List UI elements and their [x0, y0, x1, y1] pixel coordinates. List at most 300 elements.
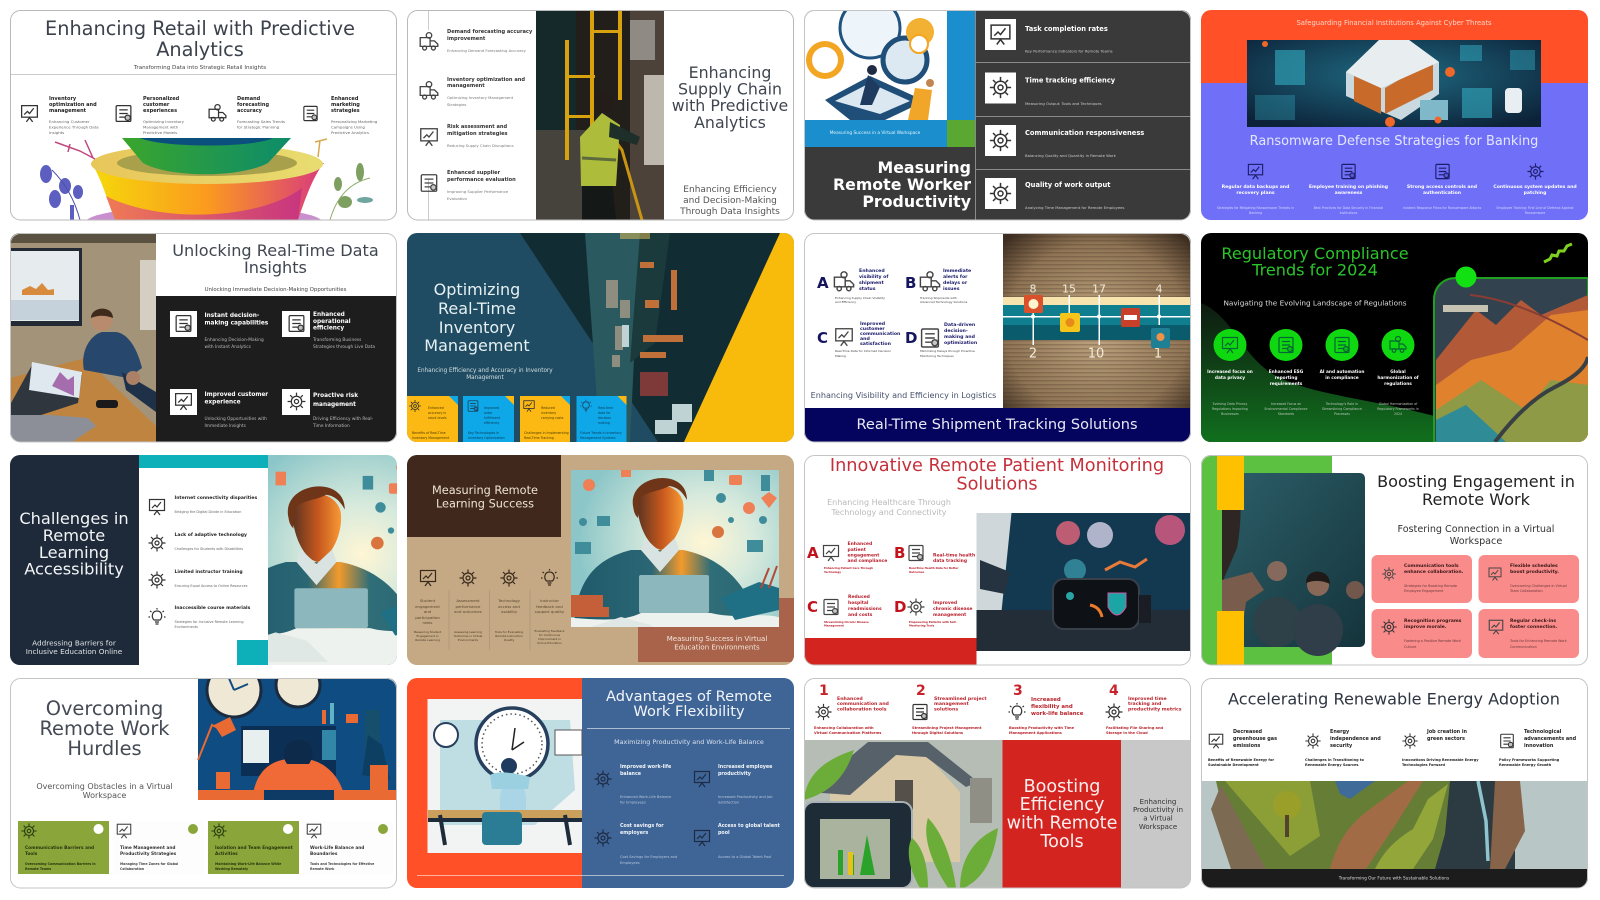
advantages list: Satisfaction	[718, 800, 739, 804]
four hurdle cards: Collaboration	[120, 867, 145, 871]
slide title: with Predictive	[672, 96, 788, 114]
four engagement cards: enhance collaboration.	[1404, 568, 1464, 574]
slide subtitle: Workspace	[1139, 823, 1177, 831]
strategy items: authentication	[1423, 190, 1461, 196]
slide subtitle: Enhancing Healthcare Through	[827, 498, 951, 506]
strategy items: Strategies for Mitigating Ransomware Threats in	[1217, 206, 1294, 210]
panel: ransomware defense	[1201, 10, 1588, 220]
list of four retail items: accuracy	[237, 108, 263, 114]
numbered tools row: tracking and	[1128, 700, 1161, 706]
tracking features: status	[859, 286, 876, 292]
student illustration	[212, 446, 454, 674]
metric descriptions: Measuring Output: Tools and Techniques	[1025, 100, 1102, 106]
four engagement cards: boost productivity.	[1510, 568, 1559, 574]
slide subtitle: Workspace	[83, 790, 126, 800]
house and meter photo	[804, 740, 1003, 888]
strategy items: Regular data backups and	[1222, 184, 1289, 190]
timeline image: 8	[1030, 282, 1036, 296]
slide subtitle: Unlocking Immediate Decision-Making Opportunities	[205, 287, 347, 293]
success metrics: access and	[498, 604, 520, 608]
success metrics: feedback and	[536, 604, 563, 608]
floating landscape illustration	[1201, 781, 1588, 869]
numbered tools row: 4	[1109, 683, 1119, 699]
tracking features: D	[905, 329, 917, 347]
four insight items	[170, 311, 375, 428]
warehouse photo	[520, 233, 781, 442]
panel: retail predictive analytics	[11, 20, 396, 220]
success metrics: Online Education	[537, 641, 562, 645]
four insight items: Proactive risk	[313, 393, 358, 399]
strategy items: patching	[1524, 190, 1546, 196]
list of four retail items: Predictive Models	[143, 130, 177, 134]
success metrics: and outcomes	[454, 608, 482, 614]
advantages list: Increased Productivity and Job	[718, 795, 773, 799]
slide subtitle: Fostering Connection in a Virtual	[1398, 524, 1554, 534]
green dot	[1456, 266, 1476, 288]
four insight items: Enhancing Decision-Making	[204, 336, 264, 342]
four engagement cards: Overcoming Challenges in Virtual	[1510, 584, 1567, 588]
success metrics: Student	[420, 598, 436, 602]
panel: real-time data insights	[10, 233, 397, 442]
top caption: Safeguarding Financial Institutions Against Cyber Threats	[1296, 19, 1492, 27]
title: Analytics	[156, 38, 244, 60]
four insight items: efficiency	[313, 326, 344, 332]
four compliance trends: Technology's Role in	[1325, 402, 1358, 406]
tracking features: communication	[860, 330, 900, 336]
list of four retail items: forecasting	[237, 102, 269, 108]
caption: Enhancing Visibility and Efficiency in Logistics	[811, 390, 996, 400]
supply chain items: Optimizing Inventory Management	[447, 94, 514, 100]
four compliance trends: Processes	[1334, 412, 1350, 416]
numbered tools row: Improved time	[1128, 696, 1167, 702]
monitoring features: Technology	[824, 570, 841, 574]
list of four retail items: Inventory	[49, 96, 77, 102]
panel: supply chain predictive analytics	[407, 10, 794, 220]
list of four retail items: Enhancing Customer	[49, 118, 90, 124]
slide subtitle: Enhancing	[1140, 798, 1176, 806]
home office illustration	[198, 663, 397, 800]
tracking features: alerts for	[943, 274, 968, 280]
success metrics: Quality	[504, 638, 514, 642]
list of four retail items: Forecasting Sales Trends	[237, 118, 285, 124]
slide title: Measuring Remote	[432, 484, 538, 496]
four compliance trends: data privacy	[1215, 374, 1245, 380]
slide title: Unlocking Real-Time Data	[172, 240, 379, 260]
slide subtitle: Maximizing Productivity and Work-Life Balance	[614, 738, 764, 746]
four hurdle cards: Working Remotely	[215, 867, 249, 871]
advantages list: pool	[718, 830, 730, 836]
slide title: Overcoming	[46, 696, 163, 720]
four benefit tiles: Real-Time Tracking	[524, 436, 554, 440]
monitoring features	[807, 540, 975, 628]
monitoring features: data tracking	[933, 558, 967, 564]
list of four retail items	[22, 96, 378, 134]
four hurdle cards: Communication Barriers and	[25, 844, 94, 850]
renewable benefits: Innovations Driving Renewable Energy	[1402, 758, 1479, 762]
renewable benefits: Technological	[1524, 729, 1562, 735]
timeline image: 2	[1029, 346, 1037, 362]
list of four retail items: customer	[143, 102, 170, 108]
warehouse worker photo	[536, 10, 664, 220]
slide title: Real-Time Shipment Tracking Solutions	[856, 417, 1138, 433]
renewable benefits: innovation	[1524, 743, 1554, 749]
four insight items: Enhanced	[313, 312, 345, 318]
four hurdle cards: Remote Teams	[25, 867, 51, 871]
numbered tools row: communication and	[837, 700, 889, 706]
landscape tablet image	[1434, 278, 1588, 442]
slide subtitle: Addressing Barriers for	[32, 638, 116, 647]
tracking features: optimization	[944, 340, 977, 346]
list of four retail items: optimization and	[49, 102, 97, 108]
slide title: Remote	[43, 526, 105, 544]
four engagement cards	[1372, 555, 1579, 658]
slide title: Boosting	[1024, 777, 1100, 797]
numbered tools row: Facilitating File Sharing and	[1106, 726, 1164, 730]
numbered tools row: Boosting Productivity with Time	[1009, 726, 1075, 730]
monitoring features: engagement	[848, 552, 880, 558]
strategy items: Best Practices for Data Security in Financial	[1314, 206, 1383, 210]
supply chain items: performance evaluation	[447, 177, 516, 183]
renewable benefits: Decreased	[1233, 729, 1263, 735]
timeline image: 1	[1154, 346, 1162, 362]
list of four retail items: Campaigns Using	[331, 124, 365, 129]
slide title: Insights	[244, 258, 307, 276]
advantages list: Increased employee	[718, 764, 773, 770]
success metrics: Evaluating Feedback	[534, 629, 565, 633]
strategy items: Incident Response Plans for Ransomware Attacks	[1403, 206, 1482, 210]
renewable benefits: Renewable Energy Sources	[1305, 763, 1358, 767]
slide title: Solutions	[956, 474, 1038, 494]
panel: remote work hurdles	[10, 663, 397, 888]
tracking features: A	[817, 274, 829, 292]
slide title: Challenges in	[19, 508, 129, 528]
numbered tools row: collaboration tools	[837, 706, 887, 712]
four compliance trends: Increased focus on	[1207, 368, 1253, 374]
slide title: Trends for 2024	[1251, 260, 1378, 279]
four benefit tiles: Benefits of Real-Time	[412, 431, 446, 435]
four benefit tiles: making	[598, 421, 610, 425]
four engagement cards: foster connection.	[1510, 624, 1558, 630]
four insight items: Driving Efficiency with Real-	[313, 416, 374, 422]
yellow wedge	[684, 233, 794, 442]
four insight items: Immediate Insights	[204, 422, 247, 428]
four benefit tiles: Inventory Management	[412, 436, 450, 440]
four insight items: with Instant Analytics	[204, 344, 252, 350]
four hurdle cards: Work-Life Balance and	[310, 844, 364, 850]
advantages list: productivity	[718, 770, 752, 776]
four benefit tiles: Challenges in Implementing	[524, 431, 569, 435]
four hurdle cards: Remote Work	[310, 867, 335, 871]
supply chain items: Reducing Supply Chain Disruptions	[447, 142, 514, 148]
supply chain items: Strategies	[447, 102, 466, 106]
success metrics: Measuring Student	[414, 630, 442, 634]
success metrics: and	[424, 608, 432, 614]
four hurdle cards: Tools	[25, 850, 38, 856]
four engagement cards: Strategies for Boosting Remote	[1404, 584, 1457, 588]
slide title: Analytics	[694, 112, 766, 132]
slide subtitle: Inclusive Education Online	[26, 646, 123, 656]
monitoring features: Enhancing Patient Care Through	[824, 566, 873, 570]
success metrics: Engagement in	[416, 634, 439, 638]
supply chain items: improvement	[447, 36, 486, 42]
numbered tools row: 1	[819, 683, 829, 699]
tracking features: C	[817, 329, 828, 347]
four benefit tiles: data for	[598, 411, 611, 415]
slide title: Measuring	[877, 158, 971, 176]
four engagement cards: Regular check-ins	[1510, 618, 1556, 624]
monitoring features: management	[933, 612, 967, 618]
success metrics: participation	[415, 614, 440, 620]
success metrics: Environments	[458, 638, 478, 642]
success metrics: Remote Learning	[415, 638, 440, 642]
accessibility list: Ensuring Equal Access to Online Resources	[174, 584, 248, 588]
tracking features: satisfaction	[860, 340, 891, 346]
footer caption: Transforming Our Future with Sustainable Solutions	[1338, 876, 1450, 882]
four benefit tiles: Future Trends in Inventory	[580, 431, 622, 435]
advantages list: employers	[620, 830, 648, 836]
supply chain items: Risk assessment and	[447, 124, 508, 130]
four compliance trends: requirements	[1270, 380, 1303, 386]
four compliance trends: in compliance	[1325, 374, 1359, 380]
four benefit tiles: Improved	[484, 406, 499, 410]
tracking features: Immediate	[943, 268, 971, 274]
success metrics: Remote Instruction	[495, 634, 523, 638]
tracking features: B	[905, 274, 916, 292]
advantages list: Access to global talent	[718, 822, 780, 828]
renewable benefits: greenhouse gas	[1233, 736, 1277, 742]
productivity illustration	[804, 0, 947, 120]
tracking features: Improved	[860, 320, 885, 326]
panel: efficiency with remote tools	[804, 678, 1191, 888]
slide title: Learning	[39, 542, 109, 562]
four compliance trends: Evolving Data Privacy	[1213, 402, 1247, 406]
metric headings: Communication responsiveness	[1025, 129, 1144, 137]
four compliance trends: Businesses	[1221, 412, 1239, 416]
success metrics: performance	[456, 604, 481, 608]
four benefit tiles: Real-time	[598, 406, 613, 410]
accessibility list: Limited instructor training	[174, 568, 243, 574]
four hurdle cards: Overcoming Communication Barriers in	[25, 862, 96, 866]
success metrics: support quality	[535, 608, 565, 614]
numbered tools row: Virtual Communication Platforms	[814, 731, 881, 735]
numbered tools row: Enhancing Collaboration with	[814, 726, 874, 730]
supply chain items: Inventory optimization and	[447, 77, 525, 83]
success metrics: for Continuous	[539, 633, 561, 637]
slide title: Advantages of Remote	[606, 688, 772, 704]
numbered tools row	[814, 683, 1182, 735]
slide title: Optimizing	[434, 280, 520, 298]
advantages list: Cost savings for	[620, 822, 664, 828]
success metrics: engagement	[415, 604, 440, 608]
monitoring features: readmissions	[848, 606, 882, 612]
accessibility list: Lack of adaptive technology	[174, 532, 247, 538]
four hurdle cards: Tools and Technologies for Effective	[310, 862, 374, 866]
four engagement cards: Flexible schedules	[1510, 562, 1558, 568]
four engagement cards: Fostering a Positive Remote Work	[1404, 639, 1461, 643]
timeline image	[1003, 233, 1191, 408]
slide subtitle: and Decision-Making	[683, 196, 777, 206]
strategy items: Strong access controls and	[1407, 184, 1477, 190]
four engagement cards: Communication tools	[1404, 562, 1459, 568]
renewable benefits: Challenges in Transitioning to	[1305, 758, 1365, 762]
numbered tools row: 3	[1013, 683, 1023, 699]
four compliance trends: Regulatory Frameworks in	[1377, 407, 1419, 411]
list of four retail items: marketing	[331, 102, 360, 108]
four insight items: Improved customer	[204, 392, 268, 398]
slide title: Ransomware Defense Strategies for Banking	[1250, 134, 1538, 149]
four benefit tiles: Reduced	[541, 406, 555, 410]
team photo	[1222, 473, 1365, 656]
numbered tools row: management	[934, 700, 969, 706]
student illustration	[561, 440, 791, 657]
four compliance trends: Regulations Impacting	[1212, 407, 1248, 411]
list of four retail items: Management with	[143, 124, 179, 129]
monitoring features: Monitoring Tools	[909, 624, 935, 628]
four insight items: Instant decision-	[204, 313, 260, 319]
slide title: Remote Worker	[833, 174, 971, 194]
renewable benefits: Renewable Energy Growth	[1499, 763, 1552, 767]
four engagement cards: improve morale.	[1404, 624, 1447, 630]
numbered tools row: Management Applications	[1009, 731, 1062, 735]
four compliance trends: Enhanced ESG	[1269, 368, 1304, 374]
tracking features: Making	[835, 354, 846, 358]
monitoring features: Enhanced	[848, 540, 872, 546]
list of four retail items: experiences	[143, 108, 177, 114]
four hurdle cards: Time Management and	[120, 844, 175, 850]
renewable benefits: security	[1330, 743, 1353, 749]
strategy items: Employee Training: First Line of Defense Against	[1496, 206, 1574, 210]
four benefit tiles	[407, 396, 626, 442]
monitoring features: Outcomes	[909, 570, 925, 574]
slide subtitle: Technology and Connectivity	[830, 508, 947, 516]
squiggle accent	[1544, 244, 1572, 262]
monitoring features: and compliance	[848, 558, 887, 564]
four benefit tiles: Management Systems	[580, 436, 616, 440]
four insight items: Strategies through Live Data	[313, 344, 375, 350]
tracking features: issues	[943, 286, 960, 292]
supply chain items	[418, 29, 533, 200]
slide subtitle: Through Data Insights	[679, 207, 780, 217]
advantages list: Cost Savings for Employers and	[620, 855, 677, 859]
tracking features: decision-	[944, 328, 968, 334]
four insight items: Transforming Business	[312, 336, 362, 342]
slide title: Boosting Engagement in	[1377, 472, 1575, 490]
accessibility list: Bridging the Digital Divide in Education	[174, 510, 241, 514]
four insight items: making capabilities	[204, 320, 269, 326]
slide subtitle: Management	[466, 375, 505, 381]
panel: engagement in remote work	[1201, 455, 1588, 665]
four engagement cards: Team Collaboration	[1509, 589, 1543, 593]
numbered tools row: Streamlined project	[934, 696, 987, 702]
four insight items: Unlocking Opportunities with	[204, 416, 267, 422]
slide title: Management	[424, 336, 530, 354]
numbered tools row: flexibility and	[1031, 704, 1073, 710]
panel: remote learning accessibility	[10, 446, 454, 674]
slide title: Remote Work	[39, 716, 170, 740]
numbered tools row: Enhanced	[837, 696, 863, 702]
four compliance trends: AI and automation	[1320, 368, 1364, 374]
four engagement cards: Communication	[1510, 645, 1537, 649]
advantages list: Enhanced Work-Life Balance	[620, 795, 672, 799]
four benefit tiles: accuracy in	[428, 411, 446, 415]
four hurdle cards: Activities	[215, 850, 238, 856]
slide title: Real-Time	[438, 298, 516, 318]
slide subtitle: Enhancing Efficiency and Accuracy in Inventory	[417, 368, 553, 374]
four hurdle cards: Boundaries	[310, 850, 338, 856]
success metrics: usability	[501, 608, 518, 614]
panel: remote learning success	[407, 440, 794, 665]
panel: real-time inventory management	[407, 233, 794, 442]
four compliance trends: Global Harmonization of	[1379, 402, 1418, 406]
slide title: Inventory	[439, 318, 515, 336]
monitoring features: A	[807, 544, 819, 562]
four benefit tiles: decision	[598, 416, 611, 420]
strategy items: Institutions	[1340, 211, 1358, 215]
timeline image: 17	[1092, 282, 1106, 296]
success metrics: Tools for Evaluating	[494, 630, 523, 634]
panel: remote patient monitoring	[804, 455, 1191, 665]
advantages list: Improved work-life	[620, 764, 672, 770]
tracking features: Enhanced	[859, 268, 885, 274]
four insight items: Time Information	[312, 422, 350, 428]
band caption: Measuring Success in a Virtual Workspace	[830, 130, 921, 136]
accessibility list: Environments	[174, 625, 198, 629]
accessibility list: Strategies for Inclusive Remote Learning	[174, 620, 244, 624]
slide title: Accessibility	[24, 559, 124, 578]
four compliance trends: 2024	[1394, 412, 1402, 416]
advantages list: for Employees	[620, 800, 646, 804]
supply chain items: management	[447, 83, 485, 89]
list of four retail items: Enhanced	[331, 96, 359, 102]
metric headings: Quality of work output	[1025, 181, 1111, 189]
timeline image: 15	[1062, 282, 1076, 296]
clock sketch illustration	[428, 699, 582, 853]
metric descriptions: Key Performance Indicators for Remote Teams	[1025, 48, 1113, 53]
monitoring features: hospital	[848, 600, 869, 606]
monitoring features: Streamlining Chronic Disease	[824, 620, 869, 624]
slide title: with Remote	[1007, 814, 1117, 834]
four insight items: management	[313, 402, 356, 408]
panel: remote work flexibility	[407, 678, 794, 888]
slide title: Remote Work	[1422, 490, 1531, 508]
rust caption: Education Environments	[674, 644, 760, 652]
tracking features: making and	[944, 334, 975, 340]
slide title: Productivity	[862, 192, 972, 210]
funnel illustration	[40, 138, 373, 220]
strategy items: Ransomware	[1525, 211, 1545, 215]
four compliance trends: Increased Focus on	[1271, 402, 1301, 406]
list of four retail items: Predictive Analytics	[331, 130, 369, 134]
renewable benefits: green sectors	[1427, 736, 1465, 742]
four insight items: experience	[204, 400, 241, 406]
four benefit tiles: Inventory Optimization	[468, 436, 505, 440]
numbered tools row: 2	[916, 683, 926, 699]
tracking features: Enhancing Supply Chain Visibility	[835, 296, 885, 300]
four compliance trends: Standards	[1278, 412, 1294, 416]
tracking features: and	[860, 336, 870, 342]
four compliance trends	[1207, 329, 1419, 416]
tracking features: Tracking Shipments with	[919, 296, 957, 300]
title: Enhancing Retail with Predictive	[45, 16, 355, 40]
success metrics: Outcomes in Virtual	[454, 634, 483, 638]
success metrics: Assessing Learning	[454, 630, 482, 634]
slide subtitle: Workspace	[1450, 536, 1502, 546]
slide subtitle: Productivity in	[1133, 806, 1183, 814]
numbered tools row: Storage in the Cloud	[1106, 731, 1148, 735]
metric headings: Time tracking efficiency	[1025, 76, 1116, 84]
four hurdle cards: Managing Time Zones for Global	[120, 862, 178, 866]
tracking features: Real-Time Data for Informed Decision	[835, 349, 891, 353]
